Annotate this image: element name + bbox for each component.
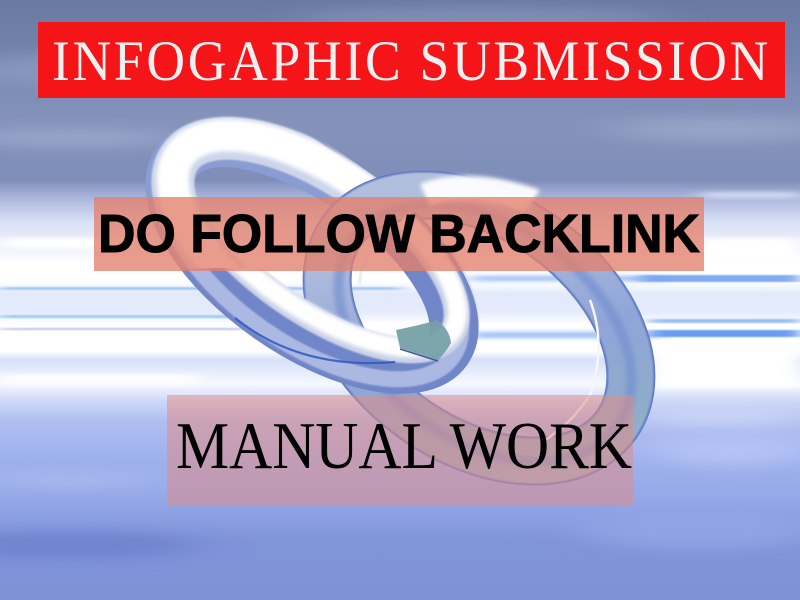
heading: manual work: MANUAL WORK bbox=[176, 409, 632, 483]
ring: right chrome ring bbox=[277, 140, 681, 516]
panel: manual work band bbox=[167, 395, 633, 506]
icon: two interlocked chrome rings bbox=[146, 116, 656, 486]
title: INFOGAPHIC SUBMISSION bbox=[52, 30, 768, 92]
heading: do follow backlink: DO FOLLOW BACKLINK bbox=[98, 204, 700, 264]
panel: title banner bbox=[38, 22, 785, 98]
panel: do follow backlink band bbox=[94, 197, 704, 271]
ring: left chrome ring bbox=[133, 91, 497, 413]
ring: front section of left ring over right ring bbox=[180, 212, 478, 394]
